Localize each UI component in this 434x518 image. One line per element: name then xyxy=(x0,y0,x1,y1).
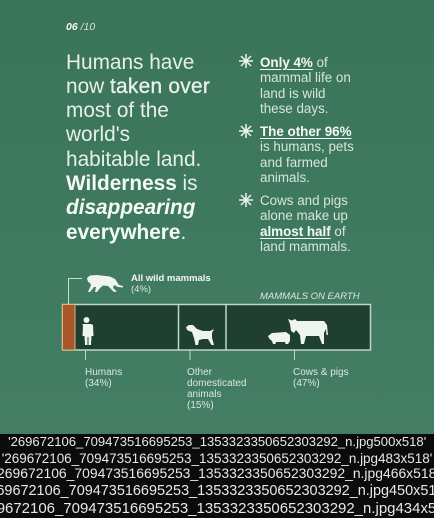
headline: Wilderness is xyxy=(66,172,198,195)
fact: the other 96%: animals. xyxy=(260,170,310,185)
label: all wild mammals: (4%) xyxy=(131,284,151,295)
icon: pig xyxy=(268,332,290,344)
label: other domesticated animals xyxy=(187,367,246,411)
icon: dog xyxy=(186,325,214,345)
bar background xyxy=(62,304,370,350)
icon: asterisk 2 xyxy=(239,124,253,138)
headline: everywhere. xyxy=(66,221,186,244)
icon: wild cat xyxy=(87,275,123,292)
label: humans: (34%) xyxy=(85,378,112,389)
wild mammals connector xyxy=(68,278,82,304)
icon: asterisk 1 xyxy=(239,54,253,68)
file name line 1: '269672106_709473516695253_1353323350652303292_n.jpg500x518' xyxy=(8,434,426,449)
label: all wild mammals xyxy=(131,273,211,295)
headline: world's xyxy=(66,123,130,146)
headline: now taken over xyxy=(66,75,210,98)
fact: cows and pigs: almost half of xyxy=(260,224,346,239)
label: other domesticated animals: Other xyxy=(187,367,212,378)
fact: the other 96%: and farmed xyxy=(260,155,328,170)
fact: the other 96%: is humans, pets xyxy=(260,139,354,154)
label: humans xyxy=(85,367,122,389)
headline: most of the xyxy=(66,99,169,122)
label: humans: Humans xyxy=(85,367,122,378)
fact: only 4%: these days. xyxy=(260,101,328,116)
icon: cow xyxy=(288,319,328,344)
wild segment xyxy=(62,304,75,350)
leader lines xyxy=(86,350,294,361)
fact: only 4%: mammal life on xyxy=(260,70,351,85)
headline: disappearing xyxy=(66,196,195,219)
icon: asterisk 3 xyxy=(239,193,253,207)
label: cows & pigs: (47%) xyxy=(293,378,320,389)
bar chart: mammals on earth xyxy=(62,275,372,360)
label: other domesticated animals: domesticated xyxy=(187,378,246,389)
label: other domesticated animals: animals xyxy=(187,389,221,400)
file name line 3: '269672106_709473516695253_1353323350652303292_n.jpg466x518' xyxy=(0,465,434,481)
fact: the other 96%: The other 96% xyxy=(260,124,352,139)
fact: the other 96% xyxy=(260,124,354,185)
dividers xyxy=(178,304,226,350)
headline xyxy=(66,50,210,244)
fact: cows and pigs: alone make up xyxy=(260,208,348,223)
fact: cows and pigs xyxy=(260,193,351,254)
fact: cows and pigs: land mammals. xyxy=(260,239,351,254)
fact: only 4% xyxy=(260,55,351,116)
headline: habitable land. xyxy=(66,148,201,171)
icon: human xyxy=(82,317,94,345)
file name line 2: '269672106_709473516695253_1353323350652303292_n.jpg483x518' xyxy=(2,451,432,466)
label: cows & pigs xyxy=(293,367,349,389)
headline: Humans have xyxy=(66,50,194,74)
fact: only 4%: Only 4% of xyxy=(260,55,328,70)
label: cows & pigs: Cows & pigs xyxy=(293,367,349,378)
label: other domesticated animals: (15%) xyxy=(187,400,214,411)
fact: cows and pigs: Cows and pigs xyxy=(260,193,348,208)
label: all wild mammals: All wild mammals xyxy=(131,273,211,284)
page number: 06 /10 xyxy=(66,21,95,33)
black file name strip xyxy=(0,434,434,518)
label: mammals on earth: MAMMALS ON EARTH xyxy=(260,291,360,302)
fact: only 4%: land is wild xyxy=(260,86,326,101)
